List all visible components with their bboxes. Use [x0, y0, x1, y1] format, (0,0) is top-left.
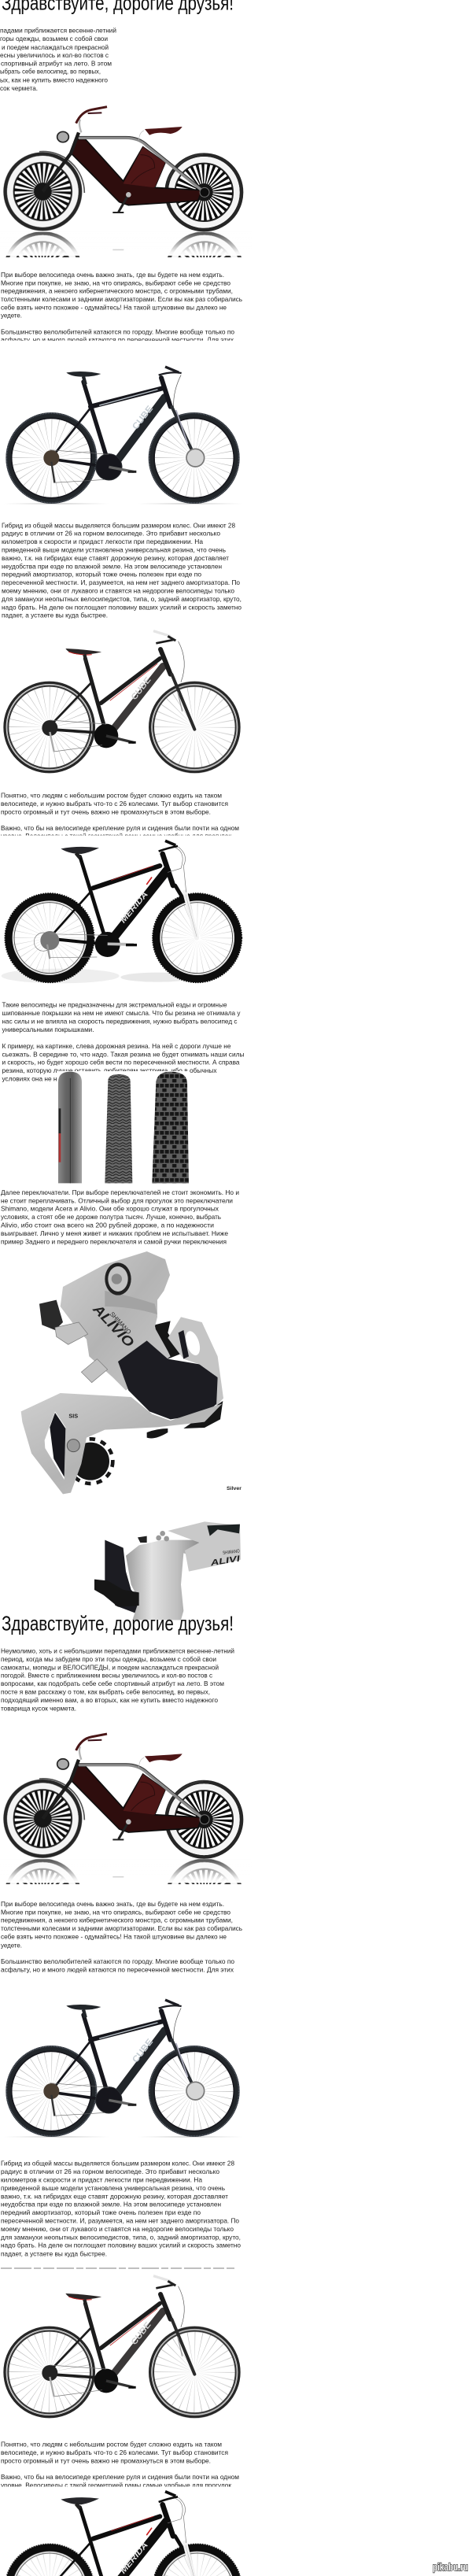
image: Merida mountain bike repeated [2, 2492, 242, 2576]
text repeated: where you will ride: уедете. [1, 1941, 22, 1949]
text: where you will ride: уедете. [1, 312, 22, 320]
intro text: посте я вам расскажу о том, как выбрать себе велосипед, во первых, [1, 1687, 210, 1695]
screws [138, 1531, 169, 1543]
text: hybrid description: для заманухи неопытных велосипедистов, типа, о, задний амортизатор, круто, [2, 595, 242, 603]
image: rear derailleur [21, 1251, 223, 1494]
text: tyres: нас силы и не влияла на скорость передвижения, нужно выбрать велосипед с [2, 1017, 238, 1025]
handlebar [153, 631, 175, 643]
text: shifters: условиях, а стоят обе не дороже полутра тысяч. Лучше, конечно, выбрать [1, 1213, 222, 1221]
image: women's hybrid bike [5, 631, 239, 772]
reflection of wheels [0, 231, 252, 309]
silver body [126, 1540, 199, 1620]
image: Merida mountain bike [2, 841, 242, 983]
black cage plate [105, 1540, 142, 1613]
image: black hybrid bike [2, 367, 245, 504]
text: where you will ride: Многие при покупке, не знаю, на что опираясь, выбирают себе не средство [1, 279, 230, 286]
front wheel [150, 682, 239, 772]
clamp lettering [209, 1549, 242, 1569]
text: shifters: Далее переключатели. При выборе переключателей не стоит экономить. Но и [1, 1188, 239, 1196]
derailleur lettering: SIS [68, 1413, 78, 1420]
headlight [57, 131, 68, 142]
right silver arm [168, 1317, 223, 1406]
handlebar [76, 107, 107, 132]
intro text: подходящий именно вам, а во вторых, как не купить вместо надежного [1, 1696, 218, 1704]
text: small riders: просто огромный и тут очень важно не промахнуться в этом выборе. [1, 808, 211, 815]
text: tyres [2, 1001, 244, 1082]
text repeated: where you will ride: При выборе велосипеда очень важно знать, где вы будете на нем ездить. [1, 1900, 224, 1908]
title repeated: Здравствуйте, дорогие друзья! [2, 1612, 234, 1635]
text: hybrid description: важно, т.к. на гибридах еще ставят дорожную резину, которая доставляет [2, 554, 229, 562]
intro text fragment: и поедем наслаждаться прекрасной [2, 43, 109, 51]
derailleur lettering [68, 1300, 138, 1420]
text: tyres: условиях она не н [2, 1074, 57, 1082]
frame [72, 139, 202, 205]
mounting bolt [105, 1262, 131, 1295]
drivetrain [42, 720, 136, 752]
text repeated: hybrid description [1, 2160, 241, 2257]
text: shifters [1, 1188, 239, 1245]
image: electric bike repeated [0, 1734, 252, 1935]
fenders [39, 151, 203, 193]
text repeated: small riders: Важно, что бы на велосипеде крепление руля и сидения были почти на одном [1, 2473, 239, 2481]
intro text: Неумолимо, хоть и с небольшими перепадами приближается весенне-летний [1, 1646, 234, 1654]
leather bag [124, 147, 165, 187]
text repeated: small riders: велосипеде, и нужно выбрать что-то с 26 колесами. Тут выбор становится [1, 2448, 228, 2456]
text: shifters: пример Заднего и переднего переключателя и самой ручки переключения [1, 1237, 227, 1245]
text: shifters: Alivio, ибо стоит она всего на 200 рублей дороже, а по надежности [1, 1221, 214, 1229]
front wheel [149, 413, 239, 503]
rear wheel [5, 682, 94, 772]
disc brake [186, 449, 205, 467]
ground shadow [2, 503, 245, 504]
intro text fragment: сок чермета. [0, 84, 38, 92]
text repeated: hybrid description: для заманухи неопытных велосипедистов, типа, о, задний амортизатор, круто, [1, 2233, 241, 2241]
clamp lettering: ALIVI [209, 1554, 242, 1569]
intro text: самокаты, мопеды и ВЕЛОСИПЕДЫ, и поедем наслаждаться прекрасной [1, 1663, 219, 1671]
adjusting bolts [55, 1322, 108, 1383]
intro text: погодой. Вместе с приближением весны увеличилось и кол-во постов с [1, 1672, 213, 1680]
intro text fragment: горы одежды, возьмем с собой свои [0, 35, 108, 43]
saddle [139, 127, 183, 140]
text: where you will ride: себе взять нечто похожее - одумайтесь! На такой штуковине вы далеко не [1, 303, 227, 311]
text: shifters: Shimano, модели Acera и Alivio. Они обе хорошо служат в прогулочных [1, 1205, 219, 1213]
text repeated: hybrid description: моему мнению, они от лукавого и ставятся на недорогие велосипеды только [1, 2225, 234, 2233]
text repeated: hybrid description: радиус в отличии от 26 на горном велосипеде. Это прибавит несколько [1, 2168, 219, 2175]
text repeated: hybrid description: неудобства при езде по влажной земле. На этом велосипеде установлен [1, 2201, 221, 2208]
intro text: товарища кусок чермета. [1, 1704, 76, 1712]
text: hybrid description: неудобства при езде по влажной земле. На этом велосипеде установлен [2, 562, 222, 570]
front wheel [6, 154, 80, 229]
frame [50, 641, 194, 734]
text: hybrid description: радиус в отличии от 26 на горном велосипеде. Это прибавит несколько [2, 530, 220, 538]
saddle [66, 371, 101, 384]
intro text fragment [0, 26, 116, 92]
road tyre [58, 1072, 82, 1183]
frame [50, 847, 197, 946]
cage opening [45, 1411, 65, 1480]
text repeated: where you will ride [1, 1900, 243, 1973]
clamp [168, 1521, 241, 1572]
text repeated: hybrid description: передний амортизатор, который тоже очень полезен при езде по [1, 2208, 201, 2216]
saddle [61, 847, 99, 858]
text repeated: where you will ride: Многие при покупке, не знаю, на что опираясь, выбирают себе не средство [1, 1908, 230, 1916]
image: black hybrid bike repeated [2, 2000, 245, 2138]
wheels [6, 413, 96, 503]
text: tyres: сьезжать. В середине то, что надо. Такая резина не будет отнимать наши силы [2, 1050, 244, 1058]
intro text fragment: ыбрать себе велосипед, во первых, [0, 68, 101, 76]
image: front derailleur [94, 1521, 242, 1620]
front wheel [153, 893, 242, 982]
saddle [65, 649, 101, 663]
handlebar [159, 367, 182, 375]
black jockey wheels and guards [38, 1300, 223, 1484]
intro text fragment: падами приближается весенне-летний [0, 26, 116, 34]
shading under knuckle [105, 1291, 157, 1314]
text: hybrid description: моему мнению, они от лукавого и ставятся на недорогие велосипеды только [2, 587, 234, 595]
text: where you will ride: При выборе велосипеда очень важно знать, где вы будете на нем ездить. [1, 271, 224, 279]
text: hybrid description: приведенной выше модели установлена универсальная резина, что очень [2, 546, 227, 554]
text: where you will ride: Большинство велолюбителей катаются по городу. Многие вообще только по [1, 328, 234, 336]
intro text fragment: ых, как не купить вместо надежного [0, 76, 108, 83]
text: hybrid description: километров к скорости и придаст легкости при передвижении. На [2, 538, 203, 545]
text: tyres: Такие велосипеды не предназначены для экстремальной езды и огромные [2, 1001, 227, 1009]
ground shadow [2, 969, 194, 983]
text repeated: small riders: просто огромный и тут очень важно не промахнуться в этом выборе. [1, 2456, 211, 2464]
text: where you will ride: толстенными колесами и задними амортизаторами. Если вы как раз собирались [1, 295, 243, 303]
text: tyres: К примеру, на картинке, слева дорожная резина. На ней с дороги лучше не [2, 1042, 231, 1050]
text: shifters: выигрывает. Лично у меня живет и никаких проблем не испытывает. Ниже [1, 1229, 228, 1237]
clamp lettering: SHIMANO [223, 1549, 240, 1556]
text repeated: small riders: Понятно, что людям с небольшим ростом будет сложно ездить на таком [1, 2441, 222, 2448]
text: tyres: резина, которую лучше оставить любителям экстрима, ибо в обычных [2, 1066, 217, 1074]
intro text: период, когда мы забудем про эти горы одежды, возьмем с собой свои [1, 1655, 216, 1663]
rear wheel [167, 155, 242, 230]
text: small riders: Понятно, что людям с небольшим ростом будет сложно ездить на таком [1, 792, 222, 800]
text repeated: hybrid description: падает, а устаете вы куда быстрее. [1, 2249, 107, 2257]
fork [42, 132, 79, 191]
black roller [94, 1580, 139, 1607]
text repeated: hybrid description: надо брать. На деле он поглощает половину ваших усилий и скорость заметно [1, 2242, 241, 2249]
derailleur lettering: SHIMANO [109, 1310, 132, 1336]
intro text fragment: спортивный атрибут на лето. В этом [1, 59, 112, 67]
text repeated: hybrid description: важно, т.к. на гибридах еще ставят дорожную резину, которая доставляет [1, 2192, 228, 2200]
text: hybrid description: падает, а устаете вы куда быстрее. [2, 612, 108, 619]
text repeated: hybrid description: километров к скорости и придаст легкости при передвижении. На [1, 2176, 202, 2184]
image: electric bike with leather frame [0, 107, 252, 309]
text repeated: where you will ride: передвижения, а некоего кибернетического монстра, с огромными трубами, [1, 1916, 233, 1924]
text repeated: where you will ride: Большинство велолюбителей катаются по городу. Многие вообще только по [1, 1957, 234, 1965]
text: hybrid description: передний амортизатор, который тоже очень полезен при езде по [2, 571, 201, 578]
handlebar [159, 841, 178, 852]
black cage guard [118, 1340, 220, 1419]
frame logo: CUBE [130, 675, 153, 702]
text: hybrid description [2, 521, 242, 619]
image: three tyres [58, 1072, 189, 1183]
silver upper body [61, 1251, 171, 1391]
text repeated: hybrid description: Гибрид из общей массы выделяется большим размером колес. Они имеют 28 [1, 2160, 234, 2168]
image: women's hybrid bike repeated [5, 2276, 239, 2417]
text repeated: small riders: уровне. Велосипеды с такой геометрией рамы самые удобные для прогулок [1, 2481, 231, 2489]
text: hybrid description: пересеченной местности. И, разумеется, на нем нет заднего амортизатора. По [2, 578, 240, 586]
text repeated: hybrid description: приведенной выше модели установлена универсальная резина, что очень [1, 2184, 226, 2192]
text: where you will ride [1, 271, 243, 344]
universal tyre [105, 1074, 132, 1183]
frame [51, 375, 195, 467]
text: tyres: и скорость, но будет хорошо себя вести по пересеченной местности. А справа [2, 1059, 240, 1066]
text: shifters: не стоит переплачивать. Отличный выбор для прогулок это переключатели [1, 1196, 233, 1204]
text repeated: where you will ride: толстенными колесами и задними амортизаторами. Если вы как раз собирались [1, 1924, 243, 1932]
text repeated: small riders [1, 2441, 239, 2489]
text: small riders [1, 792, 239, 840]
text: tyres: универсальными покрышками. [2, 1026, 94, 1033]
rear hub [200, 187, 209, 197]
rear wheel [5, 893, 94, 982]
text: small riders: Важно, что бы на велосипеде крепление руля и сидения были почти на одном [1, 824, 239, 832]
text: where you will ride: асфальту, но и много людей катаются по пересеченной местности. Для этих [1, 336, 234, 344]
knobby tyre [152, 1072, 189, 1183]
crank and pedal [112, 192, 131, 213]
text repeated: hybrid description: пересеченной местности. И, разумеется, на нем нет заднего амортизатора. По [1, 2217, 239, 2225]
intro text fragment: есны увеличилось и кол-во постов с [0, 51, 109, 59]
frame logo: MERIDA [119, 890, 150, 925]
caption: Silver: Silver [227, 1486, 242, 1491]
text: tyres: шипованные покрышки на нем не имеют смысла. Что бы резина не отнимала у [2, 1009, 241, 1017]
text: where you will ride: передвижения, а некоего кибернетического монстра, с огромными трубами, [1, 287, 233, 295]
chrome tube [79, 138, 205, 192]
text: small riders: велосипеде, и нужно выбрать что-то с 26 колесами. Тут выбор становится [1, 800, 228, 808]
drivetrain [43, 450, 136, 482]
intro text [1, 1646, 234, 1712]
text: small riders: уровне. Велосипеды с такой геометрией рамы самые удобные для прогулок [1, 832, 231, 840]
intro text: вопросами, как подобрать себе себе спортивный атрибут на лето. В этом [1, 1680, 224, 1687]
derailleur lettering: ALIVIO [90, 1300, 138, 1351]
text repeated: where you will ride: асфальту, но и много людей катаются по пересеченной местности. Для этих [1, 1965, 234, 1973]
text: hybrid description: Гибрид из общей массы выделяется большим размером колес. Они имеют 28 [2, 521, 235, 529]
text repeated: where you will ride: себе взять нечто похожее - одумайтесь! На такой штуковине вы далеко не [1, 1933, 227, 1941]
text: hybrid description: надо брать. На деле он поглощает половину ваших усилий и скорость заметно [2, 603, 242, 611]
frame logo: CUBE [131, 404, 156, 432]
lower cage arm [21, 1393, 223, 1494]
drivetrain [34, 931, 137, 959]
